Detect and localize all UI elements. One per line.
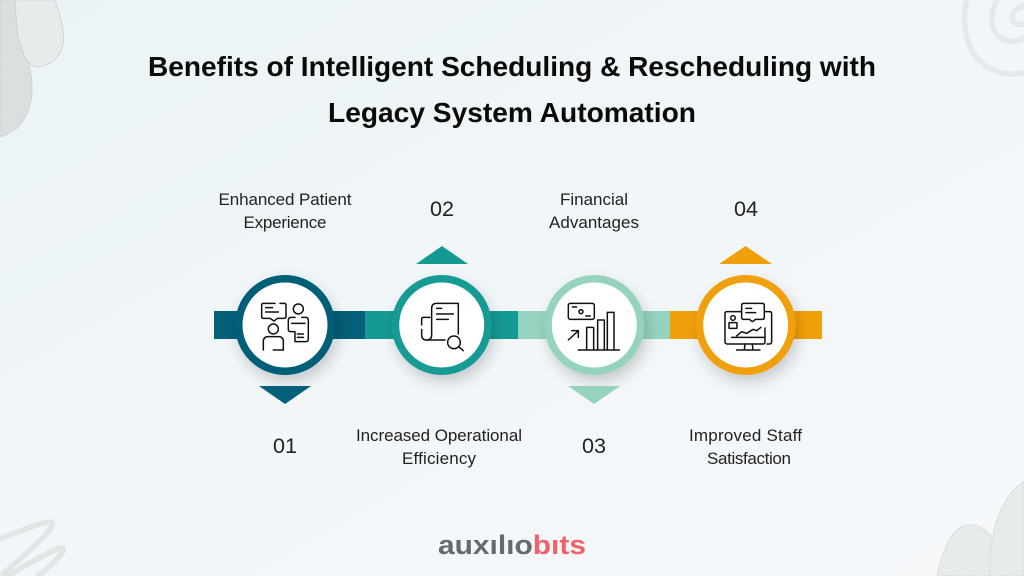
title: Benefits of Intelligent Scheduling & Rescheduling with bbox=[148, 51, 876, 82]
step 01 ring bbox=[239, 279, 331, 371]
step 04 label: Improved Staff bbox=[689, 426, 802, 445]
decoration: top-left mesh blobs bbox=[0, 0, 63, 137]
step 01 label bbox=[218, 190, 352, 232]
step 03 ring bbox=[548, 279, 641, 371]
decoration: top-right spiral bbox=[964, 0, 1024, 74]
step 02 label: Efficiency bbox=[402, 449, 476, 468]
step 03 label: Advantages bbox=[549, 213, 639, 232]
timeline bar bbox=[214, 311, 822, 339]
step 04 pointer bbox=[719, 246, 772, 264]
title: Legacy System Automation bbox=[328, 97, 696, 128]
step 04 label: Satisfaction bbox=[707, 449, 791, 468]
step 01 number: 01 bbox=[273, 435, 297, 458]
step 01 pointer bbox=[259, 386, 311, 404]
decoration: bottom-right mesh blobs bbox=[937, 481, 1024, 576]
step 03 pointer bbox=[568, 386, 620, 404]
step 03 number: 03 bbox=[582, 435, 606, 458]
icon: people talking bbox=[262, 303, 308, 350]
step 03: financial advantages bbox=[548, 190, 641, 458]
step 04 ring bbox=[699, 279, 792, 371]
step 04 label bbox=[689, 426, 802, 468]
icon: money and growth bars bbox=[568, 303, 619, 350]
step 04 number: 04 bbox=[734, 198, 758, 221]
step 01 label: Enhanced Patient bbox=[218, 190, 352, 209]
step 03 label: Financial bbox=[560, 190, 628, 209]
step 02 label bbox=[356, 426, 522, 468]
step 03 label bbox=[549, 190, 639, 232]
step 02 ring bbox=[395, 279, 488, 371]
logo: auxiliobits: auxılıo bıts bbox=[438, 530, 586, 560]
decoration: bottom-left scribble bbox=[0, 522, 63, 576]
step 02: increased operational efficiency bbox=[356, 198, 522, 468]
icon: monitor with chat bbox=[725, 303, 772, 350]
step 01: enhanced patient experience bbox=[218, 190, 352, 458]
step 02 number: 02 bbox=[430, 198, 454, 221]
step 02 pointer bbox=[416, 246, 468, 264]
icon: document search bbox=[422, 303, 463, 351]
title bbox=[148, 51, 876, 128]
step 04: improved staff satisfaction bbox=[689, 198, 802, 468]
step 01 label: Experience bbox=[244, 213, 326, 232]
step 02 label: Increased Operational bbox=[356, 426, 522, 445]
